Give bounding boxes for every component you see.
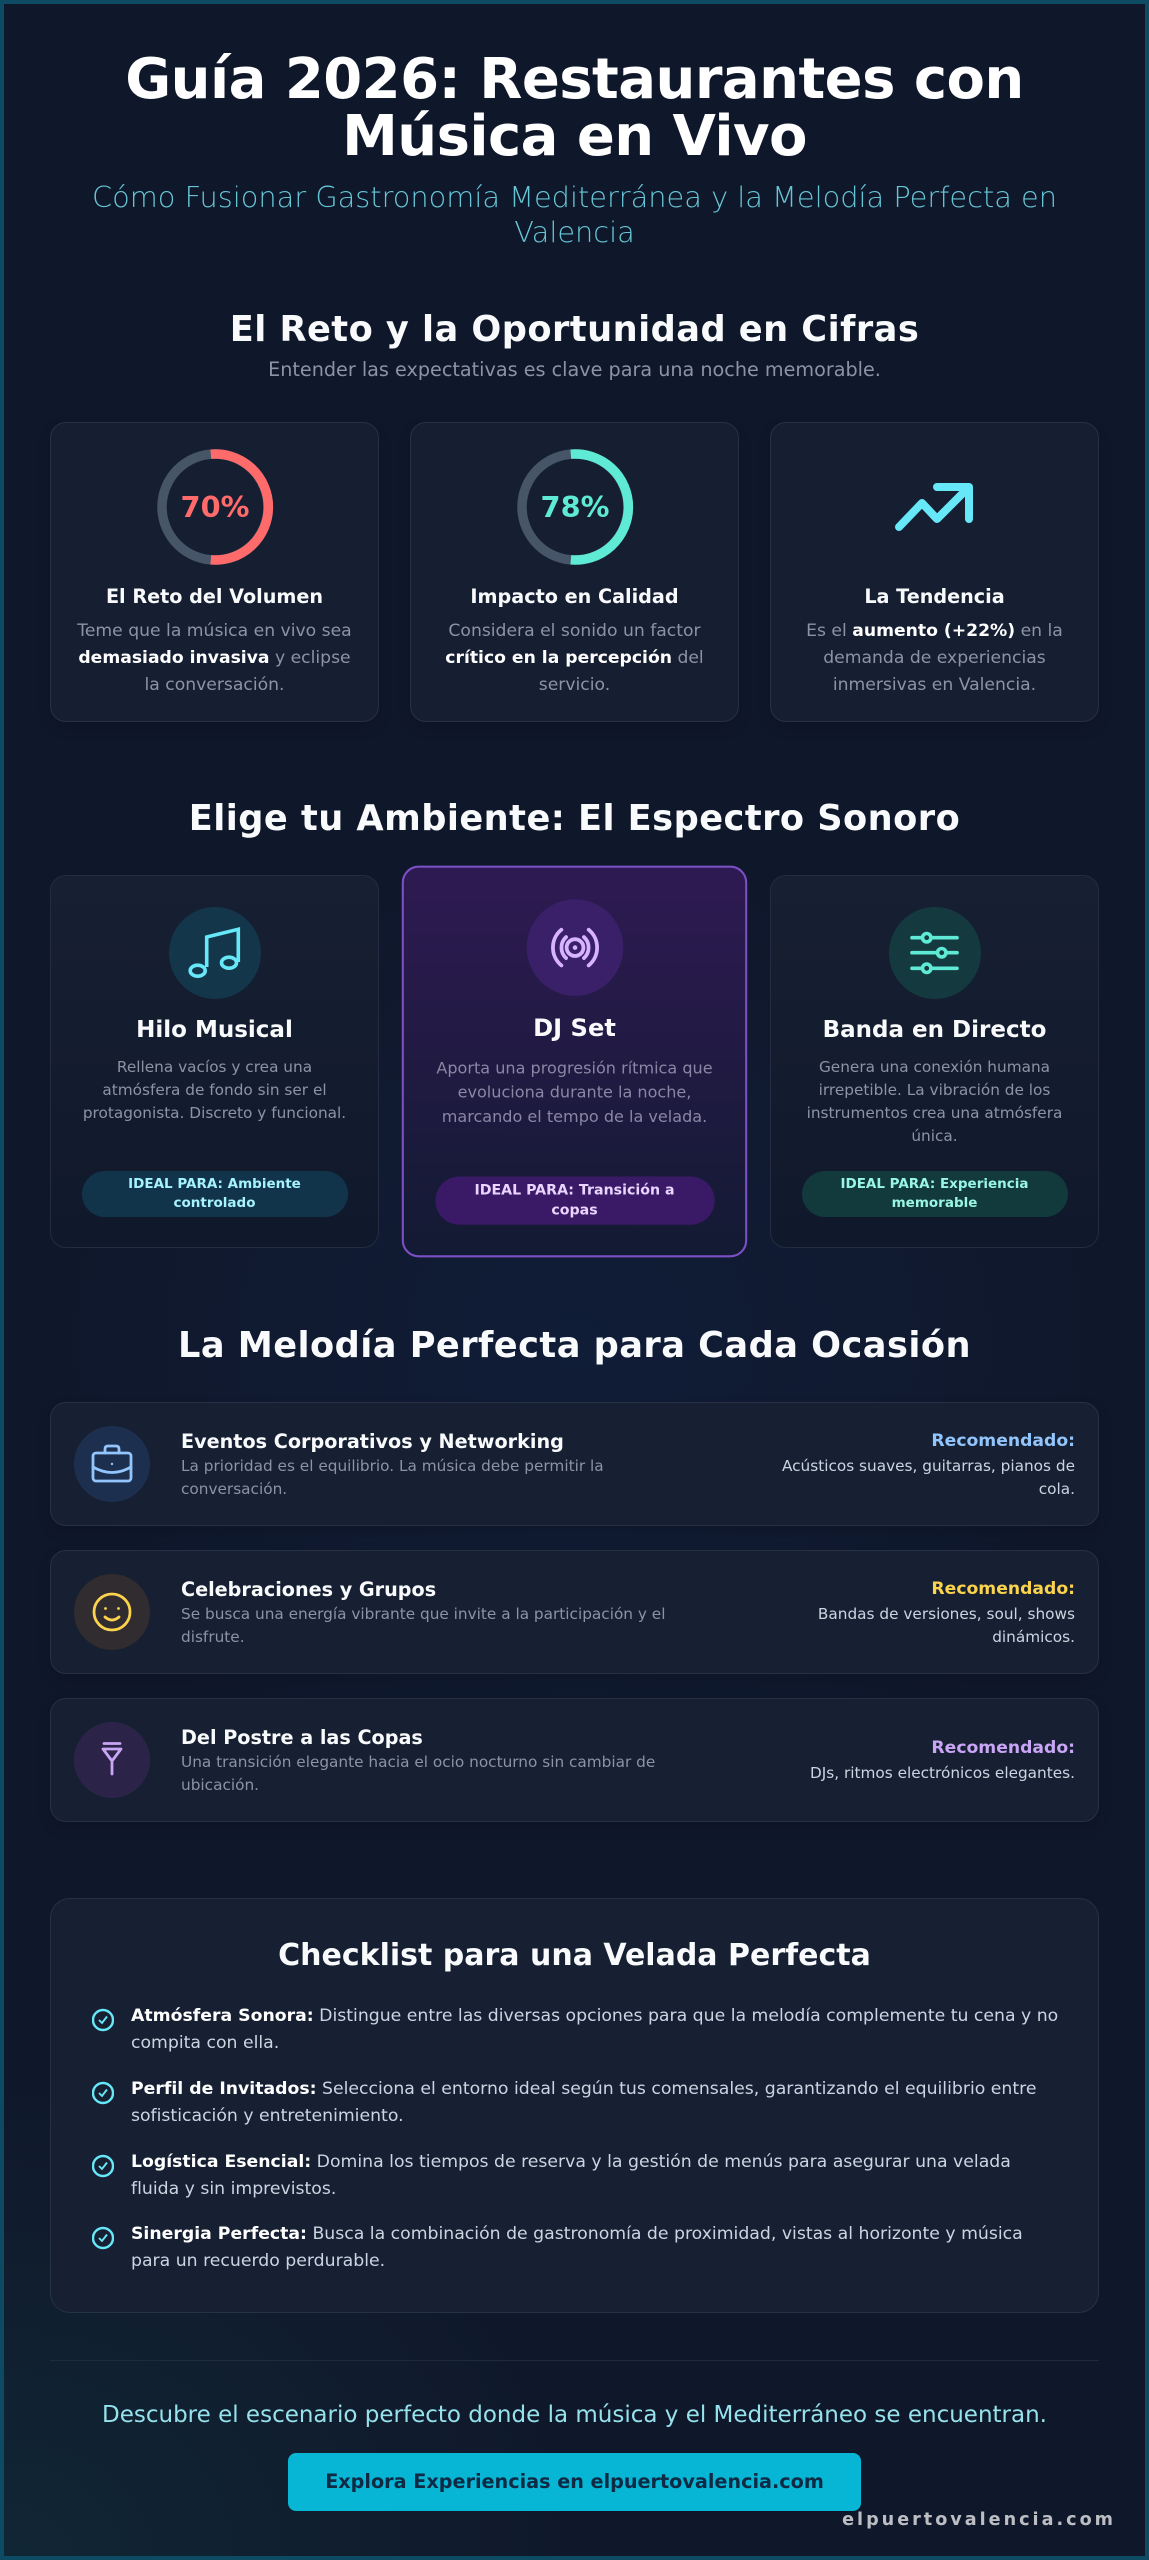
stat description: Considera el sonido un factor [448, 621, 701, 641]
row description: La prioridad es el equilibrio. La música debe permitir la [181, 1456, 604, 1474]
panel: stat volume challenge [50, 422, 379, 722]
card description: irrepetible. La vibración de los [819, 1080, 1050, 1098]
card description [436, 1058, 713, 1126]
checklist item: logistics [92, 2152, 1011, 2198]
stat description: demasiado invasiva y eclipse [78, 648, 351, 668]
stat description: inmersivas en Valencia. [833, 675, 1036, 695]
card description: marcando el tempo de la velada. [442, 1107, 707, 1126]
heading: stats section: El Reto y la Oportunidad en Cifras [230, 308, 919, 350]
checklist item: guest profile [92, 2078, 1036, 2126]
recommendation text: DJs, ritmos electrónicos elegantes. [810, 1764, 1075, 1782]
chart: 78% ring: 78% [540, 490, 609, 524]
stat description: servicio. [539, 675, 610, 695]
icon: check [92, 2154, 114, 2178]
icon: trending up arrow [895, 483, 973, 531]
row title: Eventos Corporativos y Networking [181, 1430, 564, 1453]
recommendation text: Bandas de versiones, soul, shows [818, 1604, 1075, 1622]
icon: music note [168, 907, 260, 999]
card title: Hilo Musical [136, 1017, 293, 1043]
card description [83, 1058, 346, 1122]
stat title: Impacto en Calidad [470, 585, 679, 608]
stat description: Teme que la música en vivo sea [77, 621, 352, 641]
item text: fluida y sin imprevistos. [131, 2178, 336, 2198]
row description: ubicación. [181, 1776, 259, 1794]
tag: ideal for: IDEAL PARA: Ambiente [128, 1176, 301, 1192]
card title: Banda en Directo [823, 1017, 1046, 1043]
tag: ideal for: copas [551, 1202, 598, 1218]
title [125, 47, 1024, 169]
tag: ideal for: IDEAL PARA: Experiencia [840, 1176, 1029, 1192]
recommendation text: dinámicos. [992, 1628, 1075, 1646]
recommendation text [782, 1456, 1075, 1498]
recommendation label: Recomendado: [931, 1431, 1075, 1451]
icon: check [92, 2082, 114, 2104]
item text: para un recuerdo perdurable. [131, 2250, 385, 2270]
panel: corporate events row [50, 1402, 1099, 1526]
row title: Celebraciones y Grupos [181, 1578, 436, 1601]
row description: Una transición elegante hacia el ocio nocturno sin cambiar de [181, 1752, 655, 1770]
tag: ideal for: controlado [174, 1195, 255, 1211]
checklist heading: Checklist para una Velada Perfecta [278, 1938, 871, 1972]
item text: sofisticación y entretenimiento. [131, 2106, 404, 2126]
icon: smiley [74, 1574, 150, 1650]
watermark: elpuertovalencia.com [842, 2510, 1116, 2530]
item text [131, 2006, 1058, 2052]
recommendation text [818, 1604, 1075, 1646]
card description: atmósfera de fondo sin ser el [102, 1080, 327, 1098]
row description: Se busca una energía vibrante que invite a la participación y el [181, 1604, 665, 1622]
section intro text: Entender las expectativas es clave para una noche memorable. [268, 358, 881, 381]
icon: cocktail glass [74, 1722, 150, 1798]
tag: ideal for [802, 1171, 1068, 1217]
card description: instrumentos crea una atmósfera [807, 1104, 1062, 1122]
card description: Rellena vacíos y crea una [117, 1058, 312, 1076]
recommendation label: Recomendado: [931, 1738, 1075, 1758]
heading: ambience section: Elige tu Ambiente: El Espectro Sonoro [189, 798, 960, 838]
card description: Aporta una progresión rítmica que [436, 1058, 713, 1077]
tag: ideal for [435, 1176, 714, 1225]
row description [181, 1604, 665, 1646]
chart: 78% ring [517, 449, 634, 565]
item text [131, 2152, 1011, 2198]
item text [131, 2078, 1036, 2126]
panel: celebrations row [50, 1550, 1099, 1674]
panel: DJ set featured card [402, 866, 747, 1257]
footer call-to-action text: Descubre el escenario perfecto donde la música y el Mediterráneo se encuentran. [102, 2402, 1047, 2428]
subtitle [92, 180, 1057, 249]
card description [807, 1058, 1062, 1144]
subtitle: Cómo Fusionar Gastronomía Mediterránea y la Melodía Perfecta en [92, 180, 1057, 214]
title: Música en Vivo [342, 104, 807, 169]
panel: dessert to drinks row [50, 1698, 1099, 1822]
chart: 70% ring: 70% [180, 490, 249, 524]
stat description [806, 621, 1063, 695]
checklist item: sound atmosphere [92, 2006, 1058, 2052]
tag: ideal for [82, 1171, 348, 1217]
row description: disfrute. [181, 1628, 245, 1646]
item text: Sinergia Perfecta: Busca la combinación de gastronomía de proximidad, vistas al horizonte y música [131, 2224, 1023, 2244]
item text: Logística Esencial: Domina los tiempos de reserva y la gestión de menús para asegurar una velada [131, 2152, 1011, 2172]
item text: Atmósfera Sonora: Distingue entre las diversas opciones para que la melodía complemente tu cena y no [131, 2006, 1058, 2026]
recommendation label: Recomendado: [931, 1579, 1075, 1599]
row description: conversación. [181, 1480, 287, 1498]
panel: live band card [770, 875, 1099, 1248]
icon: briefcase [74, 1426, 150, 1502]
button: explore experiences: Explora Experiencias en elpuertovalencia.com [325, 2470, 824, 2493]
card description: protagonista. Discreto y funcional. [83, 1104, 346, 1122]
button: explore experiences [288, 2453, 861, 2511]
card description: evoluciona durante la noche, [458, 1082, 691, 1101]
tag: ideal for: IDEAL PARA: Transición a [474, 1182, 675, 1199]
icon: check [92, 2008, 114, 2032]
icon: check [92, 2226, 114, 2250]
panel: checklist [50, 1898, 1099, 2313]
row description [181, 1752, 655, 1794]
stat description [445, 621, 704, 695]
item text: compita con ella. [131, 2032, 279, 2052]
checklist item: synergy [92, 2224, 1023, 2270]
panel: stat quality impact [410, 422, 739, 722]
title: Guía 2026: Restaurantes con [125, 47, 1024, 112]
row description [181, 1456, 604, 1498]
stat description: crítico en la percepción del [445, 648, 704, 668]
stat title: La Tendencia [864, 585, 1005, 608]
stat description: Es el aumento (+22%) en la [806, 621, 1063, 641]
item text [131, 2224, 1023, 2270]
subtitle: Valencia [514, 215, 635, 249]
heading: occasions section: La Melodía Perfecta para Cada Ocasión [178, 1324, 971, 1366]
panel: stat trend [770, 422, 1099, 722]
icon: sliders [888, 907, 980, 999]
chart: 70% ring [157, 449, 274, 565]
card description: única. [911, 1126, 958, 1144]
tag: ideal for: memorable [892, 1195, 977, 1211]
panel: background music card [50, 875, 379, 1248]
card title: DJ Set [533, 1015, 616, 1042]
card description: Genera una conexión humana [819, 1058, 1050, 1076]
stat description: demanda de experiencias [823, 648, 1046, 668]
item text: Perfil de Invitados: Selecciona el entorno ideal según tus comensales, garantizando el equilibrio entre [131, 2078, 1036, 2098]
recommendation text: Acústicos suaves, guitarras, pianos de [782, 1456, 1075, 1474]
icon: broadcast [526, 899, 623, 996]
stat description [77, 621, 352, 695]
stat title: El Reto del Volumen [106, 585, 323, 608]
row title: Del Postre a las Copas [181, 1726, 423, 1749]
recommendation text: cola. [1039, 1480, 1075, 1498]
stat description: la conversación. [144, 675, 285, 695]
